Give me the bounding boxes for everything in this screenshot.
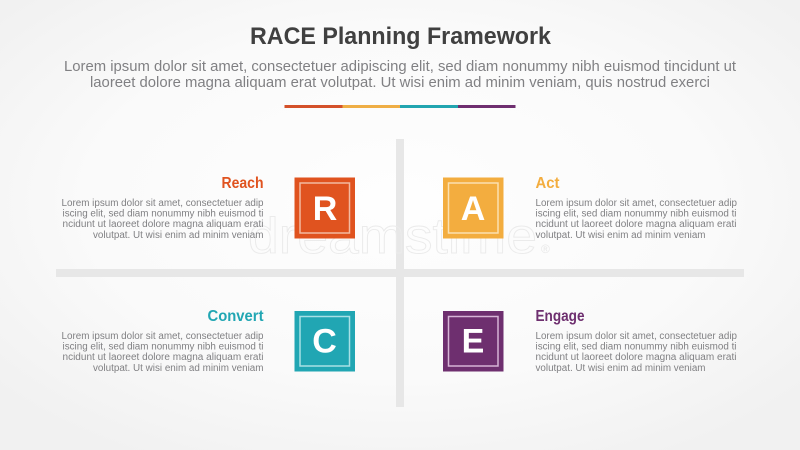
text block: convert: ncidunt ut laoreet dolore magna aliquam erati	[62, 352, 264, 363]
icon: C square	[294, 311, 355, 372]
text block: reach: ncidunt ut laoreet dolore magna aliquam erati	[62, 219, 264, 230]
heading: convert: Convert	[208, 308, 264, 325]
text block: engage	[536, 331, 737, 374]
text block: convert: volutpat. Ut wisi enim ad minim veniam	[93, 363, 264, 374]
panel: engage	[443, 308, 737, 374]
icon: R square: R	[313, 190, 337, 228]
text block: reach: Lorem ipsum dolor sit amet, consectetuer adip	[62, 198, 264, 209]
subtitle text: laoreet dolore magna aliquam erat volutpat. Ut wisi enim ad minim veniam, quis nostrud exerci	[90, 74, 710, 91]
icon: A square: A	[461, 190, 485, 228]
icon: A square	[443, 178, 504, 238]
heading: act: Act	[536, 175, 560, 192]
subtitle text: Lorem ipsum dolor sit amet, consectetuer adipiscing elit, sed diam nonummy nibh euismod tincidunt ut	[64, 58, 737, 75]
icon: E square: E	[462, 322, 484, 360]
text block: act: volutpat. Ut wisi enim ad minim veniam	[536, 230, 706, 241]
heading: engage: Engage	[536, 308, 585, 325]
text block: reach	[62, 198, 264, 241]
heading: reach: Reach	[222, 175, 264, 192]
subtitle text	[64, 58, 737, 91]
icon: R square	[294, 178, 355, 238]
icon: C square: C	[312, 322, 337, 360]
text block: act	[536, 198, 737, 241]
text block: act: ncidunt ut laoreet dolore magna aliquam erati	[536, 219, 736, 230]
quadrant cross divider	[56, 139, 744, 407]
title: RACE Planning Framework	[250, 23, 552, 50]
icon: E square	[443, 311, 504, 372]
text block: engage: iscing elit, sed diam nonummy nibh euismod ti	[536, 342, 736, 352]
text block: reach: volutpat. Ut wisi enim ad minim veniam	[93, 230, 264, 241]
text block: act: iscing elit, sed diam nonummy nibh euismod ti	[536, 208, 736, 220]
panel: convert	[62, 308, 355, 374]
text block: engage: Lorem ipsum dolor sit amet, consectetuer adip	[536, 331, 737, 342]
text block: convert: Lorem ipsum dolor sit amet, consectetuer adip	[62, 331, 264, 342]
text block: engage: volutpat. Ut wisi enim ad minim veniam	[536, 363, 706, 374]
title underline colour bar	[284, 105, 516, 108]
panel: act	[443, 175, 737, 241]
text block: engage: ncidunt ut laoreet dolore magna aliquam erati	[536, 352, 736, 363]
text block: act: Lorem ipsum dolor sit amet, consectetuer adip	[536, 198, 737, 209]
watermark: ®	[541, 242, 550, 256]
text block: convert	[62, 331, 264, 374]
text block: reach: iscing elit, sed diam nonummy nibh euismod ti	[62, 208, 264, 220]
watermark: dreamstime	[248, 208, 537, 264]
panel: reach	[62, 175, 355, 241]
text block: convert: iscing elit, sed diam nonummy nibh euismod ti	[62, 342, 264, 352]
